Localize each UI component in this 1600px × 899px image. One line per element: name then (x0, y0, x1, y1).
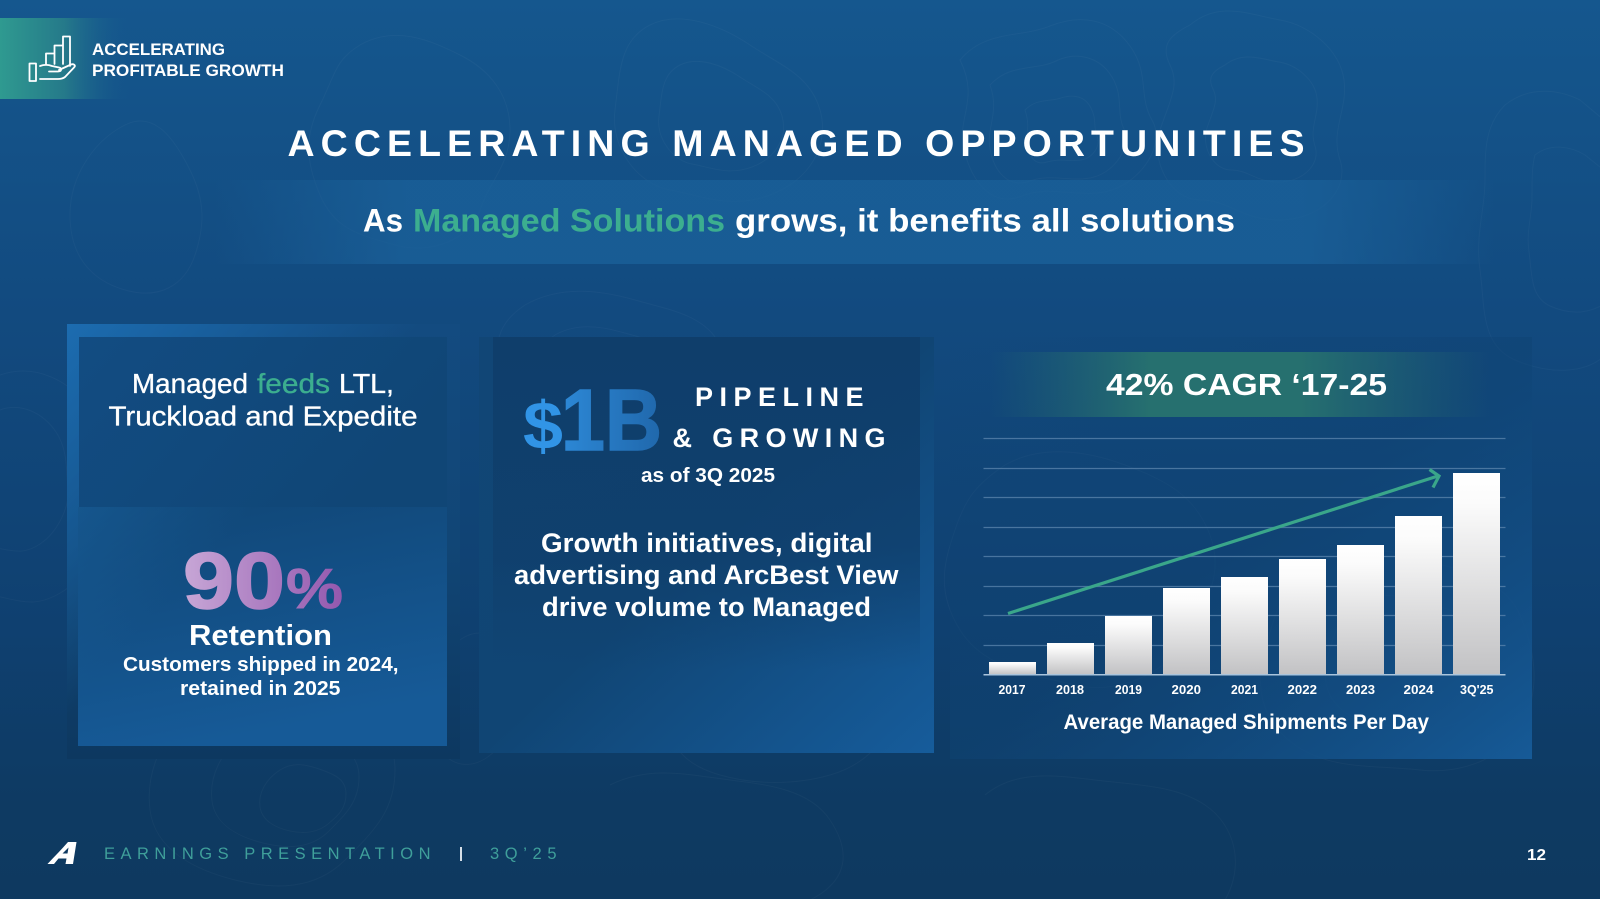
arrow: growth trend (1008, 470, 1439, 614)
retention panel (78, 507, 447, 746)
axis labels: 2021 (1231, 682, 1258, 697)
outer frame base (67, 324, 460, 759)
tag text: PROFITABLE GROWTH (92, 62, 284, 80)
stat: 90%: 90 (183, 536, 285, 625)
axis labels: 2022 (1288, 682, 1317, 697)
subtitle text: grows, it benefits all solutions (735, 202, 1235, 238)
pipeline heading (672, 382, 886, 453)
growth text: drive volume to Managed (542, 592, 871, 622)
axis labels: 3Q'25 (1460, 682, 1494, 697)
panel background (950, 337, 1532, 759)
date note: as of 3Q 2025 (641, 465, 775, 487)
footer period: 3Q’25 (490, 845, 556, 863)
managed feeds text: Managed (132, 368, 248, 399)
stat: $1B: $ (523, 388, 563, 464)
subtitle text (363, 202, 1235, 238)
managed feeds text: Truckload and Expedite (108, 400, 418, 432)
stat: 90%: % (286, 557, 343, 621)
managed feeds text: LTL, (339, 368, 394, 399)
outer frame highlight (67, 324, 460, 759)
retention label: Retention (189, 620, 332, 652)
title: ACCELERATING MANAGED OPPORTUNITIES (288, 122, 1304, 164)
axis labels: 2017 (998, 682, 1026, 697)
axis labels (998, 682, 1494, 697)
stat: $1B (523, 372, 662, 469)
managed feeds text: feeds (257, 368, 330, 399)
retention description: retained in 2025 (180, 678, 340, 700)
axis labels: 2018 (1056, 682, 1084, 697)
footer text: EARNINGS PRESENTATION (104, 845, 430, 863)
footer divider (460, 847, 462, 861)
growth text (514, 528, 900, 622)
bar chart (984, 438, 1506, 675)
stat: $1B: 1B (561, 372, 662, 469)
CAGR heading: 42% CAGR ‘17-25 (1106, 367, 1387, 402)
logo: A mark (48, 842, 76, 864)
CAGR band (990, 352, 1490, 417)
footer (48, 842, 1546, 864)
axis labels: 2019 (1115, 682, 1142, 697)
subtitle text: As (363, 202, 403, 238)
panel: pipeline (479, 337, 934, 753)
pipeline heading: PIPELINE (695, 382, 864, 412)
outer panel (479, 337, 934, 753)
panel: shipments chart (950, 337, 1532, 759)
chart caption: Average Managed Shipments Per Day (1064, 711, 1429, 734)
panel: managed feeds and retention (67, 324, 460, 759)
axis labels: 2020 (1172, 682, 1201, 697)
subtitle band (215, 180, 1495, 264)
inner panel (493, 337, 920, 753)
managed feeds text (108, 368, 418, 432)
section tag: accelerating profitable growth (0, 18, 284, 99)
growth text: Growth initiatives, digital (541, 528, 872, 558)
tag text (92, 41, 284, 80)
axis labels: 2023 (1346, 682, 1375, 697)
inner panel (79, 337, 447, 507)
growth text: advertising and ArcBest View (514, 560, 900, 590)
pipeline heading: & GROWING (672, 423, 886, 453)
tag text: ACCELERATING (92, 41, 225, 59)
subtitle text: Managed Solutions (413, 202, 725, 238)
stat: 90% (183, 536, 343, 625)
axis labels: 2024 (1404, 682, 1434, 697)
tag background (0, 18, 130, 99)
retention description: Customers shipped in 2024, (123, 654, 398, 676)
band background (215, 180, 1495, 264)
retention description (123, 654, 398, 700)
icon: bars on open hand (30, 36, 75, 81)
page number: 12 (1527, 847, 1546, 864)
